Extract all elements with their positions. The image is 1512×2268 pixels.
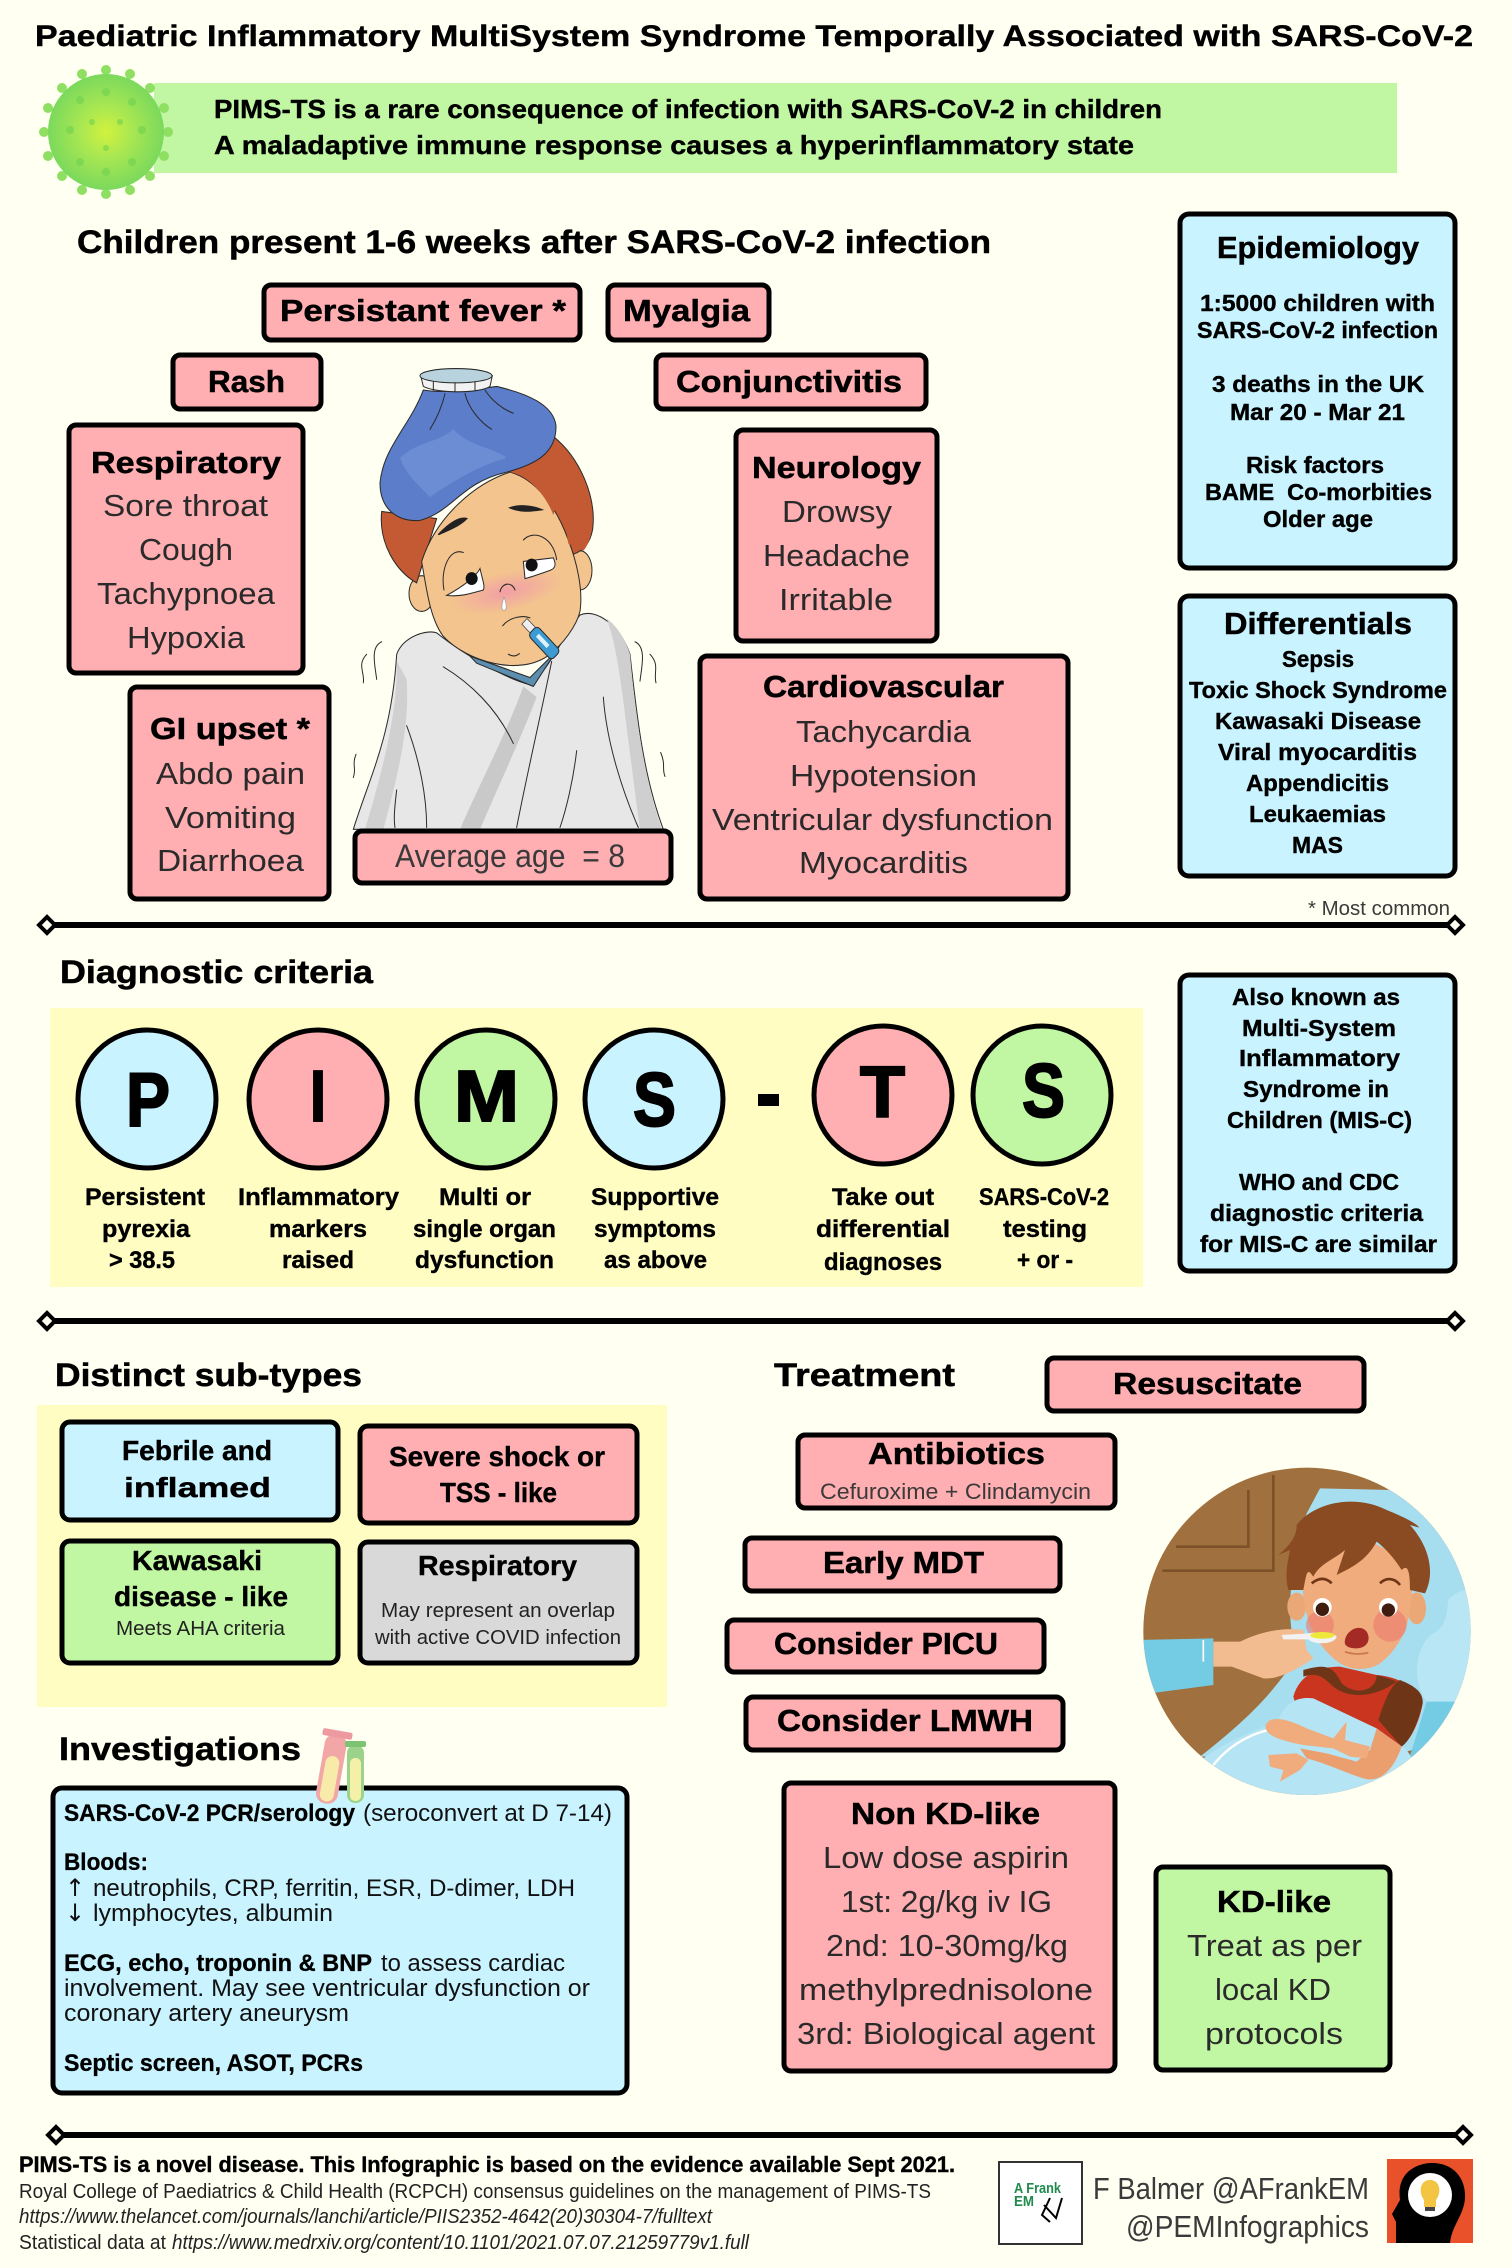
treatment: antibiotics: Cefuroxime + Clindamycin xyxy=(820,1479,1091,1504)
panel: GI upset xyxy=(130,687,329,899)
subtype: febrile and inflamed: inflamed xyxy=(124,1472,271,1503)
panel: also known as xyxy=(1180,975,1455,1271)
panel: epidemiology xyxy=(1180,214,1455,568)
letter S second: SARS-CoV-2 xyxy=(979,1184,1109,1211)
footer: sources: PIMS-TS is a novel disease. This Infographic is based on the evidence available Sept 2021. xyxy=(19,2152,955,2177)
panel: GI upset: Diarrhoea xyxy=(157,843,305,878)
panel: KD-like: Treat as per xyxy=(1187,1928,1362,1963)
banner: summary xyxy=(154,83,1397,173)
panel: also known as: diagnostic criteria xyxy=(1210,1200,1423,1226)
panel: respiratory: Tachypnoea xyxy=(97,576,276,611)
credit: authors: F Balmer @AFrankEM xyxy=(1093,2171,1369,2206)
illustration: sick child with ice pack and thermometer xyxy=(353,369,665,829)
letter T: diagnoses xyxy=(824,1249,942,1276)
panel: respiratory: Hypoxia xyxy=(127,620,246,655)
symptom: rash xyxy=(173,355,321,409)
panel: respiratory: Respiratory xyxy=(91,445,282,480)
panel: also known as: Inflammatory xyxy=(1239,1045,1400,1071)
letter M: Multi or xyxy=(439,1184,531,1211)
symptom: myalgia xyxy=(608,285,769,340)
letter T: differential xyxy=(816,1216,950,1243)
letter S: symptoms xyxy=(594,1216,716,1243)
treatment: antibiotics: Antibiotics xyxy=(868,1436,1045,1471)
logo: A Frank EM xyxy=(999,2162,1082,2244)
letter S: Supportive xyxy=(591,1184,719,1211)
nose, drip, mouth xyxy=(500,584,530,656)
panel: KD-like: local KD xyxy=(1215,1972,1331,2007)
face xyxy=(422,472,581,666)
credit: authors xyxy=(1093,2171,1369,2244)
panel: KD-like xyxy=(1156,1867,1390,2070)
panel: GI upset: Vomiting xyxy=(165,800,296,835)
letter T xyxy=(814,1026,952,1276)
panel: differentials: Sepsis xyxy=(1282,646,1354,672)
symptom: rash: Rash xyxy=(208,364,285,399)
callout: average age: Average age = 8 xyxy=(395,838,625,874)
dash xyxy=(758,1094,779,1106)
subtype: febrile and inflamed xyxy=(62,1422,338,1520)
treatment: consider LMWH xyxy=(746,1697,1063,1750)
panel: epidemiology: Mar 20 - Mar 21 xyxy=(1230,399,1405,425)
panel: differentials: MAS xyxy=(1292,832,1343,858)
shivering lines xyxy=(353,642,665,777)
background wall xyxy=(1133,1460,1480,1803)
symptom: myalgia: Myalgia xyxy=(623,293,751,328)
subtype: respiratory: May represent an overlap xyxy=(381,1600,615,1622)
panel: respiratory xyxy=(69,425,303,673)
panel: investigations xyxy=(53,1788,627,2093)
blanket folds xyxy=(365,619,662,829)
panel: investigations: Bloods: xyxy=(64,1849,148,1876)
collar xyxy=(470,640,563,686)
blanket xyxy=(353,613,663,829)
ice pack creases xyxy=(430,390,513,429)
panel: respiratory: Sore throat xyxy=(103,488,268,523)
panel: neurology: Irritable xyxy=(779,582,893,617)
subtype: severe shock xyxy=(360,1426,637,1523)
letter M: dysfunction xyxy=(415,1247,554,1274)
panel: KD-like: KD-like xyxy=(1217,1884,1331,1919)
ice pack cap xyxy=(420,369,492,392)
panel: investigations: SARS-CoV-2 PCR/serology xyxy=(64,1800,356,1827)
letter P: P xyxy=(126,1058,170,1143)
panel: GI upset: Abdo pain xyxy=(156,756,305,791)
shirt xyxy=(1293,1667,1423,1747)
letter P: pyrexia xyxy=(102,1216,191,1243)
eyes xyxy=(438,506,557,596)
letter T: Take out xyxy=(832,1184,934,1211)
ears xyxy=(409,551,592,611)
banner: summary: A maladaptive immune response causes a hyperinflammatory state xyxy=(214,130,1134,160)
panel: epidemiology: SARS-CoV-2 infection xyxy=(1197,317,1438,343)
ice pack highlight xyxy=(400,429,507,497)
footer: sources: Royal College of Paediatrics & Child Health (RCPCH) consensus guidelines on the management of PIMS-TS xyxy=(19,2181,931,2203)
panel: epidemiology: 3 deaths in the UK xyxy=(1212,371,1424,397)
panel: also known as: Syndrome in xyxy=(1243,1076,1389,1102)
letter S xyxy=(585,1030,723,1274)
panel: differentials xyxy=(1180,596,1455,876)
panel: cardiovascular: Ventricular dysfunction xyxy=(712,802,1053,837)
panel: also known as: Multi-System xyxy=(1242,1015,1396,1041)
letter M: M xyxy=(454,1057,519,1137)
panel: non KD-like: Non KD-like xyxy=(851,1796,1040,1831)
thermometer xyxy=(520,617,561,660)
treatment: resuscitate xyxy=(1047,1358,1364,1411)
hair back xyxy=(381,511,437,583)
panel: investigations: ↑ xyxy=(65,1874,85,1902)
footer: sources: https://www.medrxiv.org/content/10.1101/2021.07.07.21259779v1.full xyxy=(172,2232,750,2254)
panel: differentials: Differentials xyxy=(1224,606,1412,641)
letter S second: S xyxy=(1022,1049,1065,1134)
panel: PIMS-TS mnemonic xyxy=(50,1008,1143,1287)
subtype: febrile and inflamed: Febrile and xyxy=(122,1435,272,1466)
callout: average age xyxy=(355,831,671,883)
footer: sources: https://www.thelancet.com/journals/lanchi/article/PIIS2352-4642(20)30304-7/fulltext xyxy=(19,2206,713,2228)
subtype: respiratory xyxy=(360,1542,637,1663)
footnote: most common: * Most common xyxy=(1308,898,1450,920)
panel: cardiovascular: Tachycardia xyxy=(796,714,972,749)
letter S second: + or - xyxy=(1017,1247,1073,1274)
letter I: Inflammatory xyxy=(238,1184,400,1211)
panel: cardiovascular: Cardiovascular xyxy=(763,669,1004,704)
eyes and brows xyxy=(1312,1579,1400,1617)
panel: also known as: Also known as xyxy=(1232,984,1400,1010)
panel: epidemiology: Epidemiology xyxy=(1217,230,1420,265)
pillow xyxy=(1200,1488,1473,1757)
panel: investigations: ↓ xyxy=(65,1899,85,1927)
subtype: respiratory: Respiratory xyxy=(418,1550,577,1581)
letter S second: testing xyxy=(1003,1216,1087,1243)
panel: differentials: Viral myocarditis xyxy=(1218,739,1417,765)
panel: non KD-like: 3rd: Biological agent xyxy=(797,2016,1095,2051)
panel: respiratory: Cough xyxy=(139,532,233,567)
panel: differentials: Kawasaki Disease xyxy=(1215,708,1421,734)
panel: non KD-like: Low dose aspirin xyxy=(823,1840,1069,1875)
panel: investigations: neutrophils, CRP, ferritin, ESR, D-dimer, LDH xyxy=(93,1875,575,1902)
hair xyxy=(1278,1502,1430,1593)
letter I xyxy=(238,1030,400,1274)
panel: epidemiology: BAME Co-morbities xyxy=(1205,479,1432,505)
panel: sub-types xyxy=(37,1405,667,1707)
panel: neurology: Drowsy xyxy=(782,494,893,529)
heading: distinct sub-types: Distinct sub-types xyxy=(55,1357,362,1393)
heading: investigations: Investigations xyxy=(59,1731,301,1767)
panel: neurology: Neurology xyxy=(752,450,922,485)
title: Paediatric Inflammatory MultiSystem Syndrome Temporally Associated with SARS-CoV-2 xyxy=(35,20,1473,53)
treatment: consider PICU: Consider PICU xyxy=(774,1626,998,1661)
subtype: Kawasaki-like: Meets AHA criteria xyxy=(116,1618,286,1640)
letter S: S xyxy=(633,1058,676,1143)
logo: PEM Infographics head xyxy=(1387,2159,1473,2243)
panel: differentials: Toxic Shock Syndrome xyxy=(1189,677,1447,703)
illustration: child being given medicine xyxy=(1133,1460,1480,1803)
panel: cardiovascular: Hypotension xyxy=(790,758,977,793)
treatment: consider PICU xyxy=(727,1620,1044,1672)
panel: investigations: (seroconvert at D 7-14) xyxy=(363,1800,612,1827)
symptom: conjunctivitis xyxy=(656,355,926,409)
heading: diagnostic criteria: Diagnostic criteria xyxy=(60,954,373,990)
subtype: Kawasaki-like: disease - like xyxy=(114,1581,288,1612)
panel: epidemiology: Risk factors xyxy=(1246,452,1384,478)
panel: differentials: Appendicitis xyxy=(1246,770,1389,796)
icon: test tubes xyxy=(310,1728,366,1806)
icon: virus xyxy=(39,65,173,199)
subtype: severe shock: Severe shock or xyxy=(389,1441,605,1472)
cheeks and nose blush xyxy=(447,560,566,624)
letter S second xyxy=(973,1026,1111,1274)
treatment: antibiotics xyxy=(798,1435,1115,1508)
letter I: raised xyxy=(282,1247,354,1274)
panel: investigations: ECG, echo, troponin & BNP xyxy=(64,1950,372,1977)
footer: sources xyxy=(19,2152,955,2254)
panel: also known as: WHO and CDC xyxy=(1239,1169,1399,1195)
head xyxy=(1303,1533,1412,1669)
symptom: persistent fever: Persistant fever * xyxy=(280,293,567,328)
logo: A Frank EM: A Frank xyxy=(1014,2180,1062,2197)
panel: investigations: lymphocytes, albumin xyxy=(93,1900,333,1927)
spoon xyxy=(1282,1632,1337,1643)
heading: treatment: Treatment xyxy=(774,1357,955,1393)
letter I: I xyxy=(310,1057,326,1137)
subtype: Kawasaki-like: Kawasaki xyxy=(132,1545,262,1576)
panel: GI upset: GI upset * xyxy=(150,711,311,746)
panel: investigations: to assess cardiac xyxy=(381,1950,565,1977)
letter M: single organ xyxy=(413,1216,556,1243)
letter P: > 38.5 xyxy=(109,1247,175,1274)
sleeve and caregiver arm xyxy=(1144,1638,1214,1693)
panel: investigations: Septic screen, ASOT, PCRs xyxy=(64,2050,363,2077)
panel: epidemiology: Older age xyxy=(1263,506,1373,532)
panel: cardiovascular: Myocarditis xyxy=(799,845,968,880)
panel: non KD-like: 1st: 2g/kg iv IG xyxy=(841,1884,1052,1919)
panel: also known as: for MIS-C are similar xyxy=(1200,1231,1437,1257)
letter T: T xyxy=(860,1053,905,1133)
subtype: severe shock: TSS - like xyxy=(440,1477,557,1508)
treatment: resuscitate: Resuscitate xyxy=(1113,1366,1302,1401)
footer: sources: Statistical data at xyxy=(19,2232,166,2254)
letter I: markers xyxy=(269,1216,367,1243)
ear left, ear right xyxy=(1287,1593,1306,1621)
treatment: consider LMWH: Consider LMWH xyxy=(777,1703,1033,1738)
panel: investigations: coronary artery aneurysm xyxy=(64,2000,349,2027)
letter P xyxy=(78,1030,216,1274)
panel: epidemiology: 1:5000 children with xyxy=(1200,290,1435,316)
panel: neurology xyxy=(736,430,937,641)
door panels xyxy=(1162,1475,1273,1571)
mouth xyxy=(1345,1628,1369,1648)
letter P: Persistent xyxy=(85,1184,205,1211)
symptom: persistent fever xyxy=(264,285,580,340)
banner: summary: PIMS-TS is a rare consequence of infection with SARS-CoV-2 in children xyxy=(214,94,1162,124)
subtype: respiratory: with active COVID infection xyxy=(374,1627,621,1649)
treatment: early MDT: Early MDT xyxy=(823,1545,984,1580)
blanket xyxy=(1203,1698,1413,1797)
cheeks xyxy=(1306,1612,1334,1634)
subtype: Kawasaki-like xyxy=(62,1541,338,1663)
panel: non KD-like: methylprednisolone xyxy=(799,1972,1093,2007)
panel: KD-like: protocols xyxy=(1205,2016,1343,2051)
arms xyxy=(1300,1728,1402,1779)
fringe xyxy=(403,444,593,560)
symptom: conjunctivitis: Conjunctivitis xyxy=(676,364,902,399)
panel: neurology: Headache xyxy=(763,538,910,573)
panel: also known as: Children (MIS-C) xyxy=(1227,1107,1412,1133)
panel: cardiovascular xyxy=(700,656,1068,899)
panel: differentials: Leukaemias xyxy=(1249,801,1386,827)
heading: presentation: Children present 1-6 weeks after SARS-CoV-2 infection xyxy=(77,224,991,260)
letter M xyxy=(413,1030,556,1274)
panel: non KD-like xyxy=(784,1783,1115,2071)
ice pack xyxy=(380,386,556,521)
letter S: as above xyxy=(604,1247,707,1274)
logo: A Frank EM: EM xyxy=(1014,2193,1034,2210)
panel: investigations: involvement. May see ventricular dysfunction or xyxy=(64,1975,590,2002)
panel: non KD-like: 2nd: 10-30mg/kg xyxy=(826,1928,1068,1963)
credit: authors: @PEMInfographics xyxy=(1126,2209,1369,2244)
treatment: early MDT xyxy=(745,1538,1060,1591)
